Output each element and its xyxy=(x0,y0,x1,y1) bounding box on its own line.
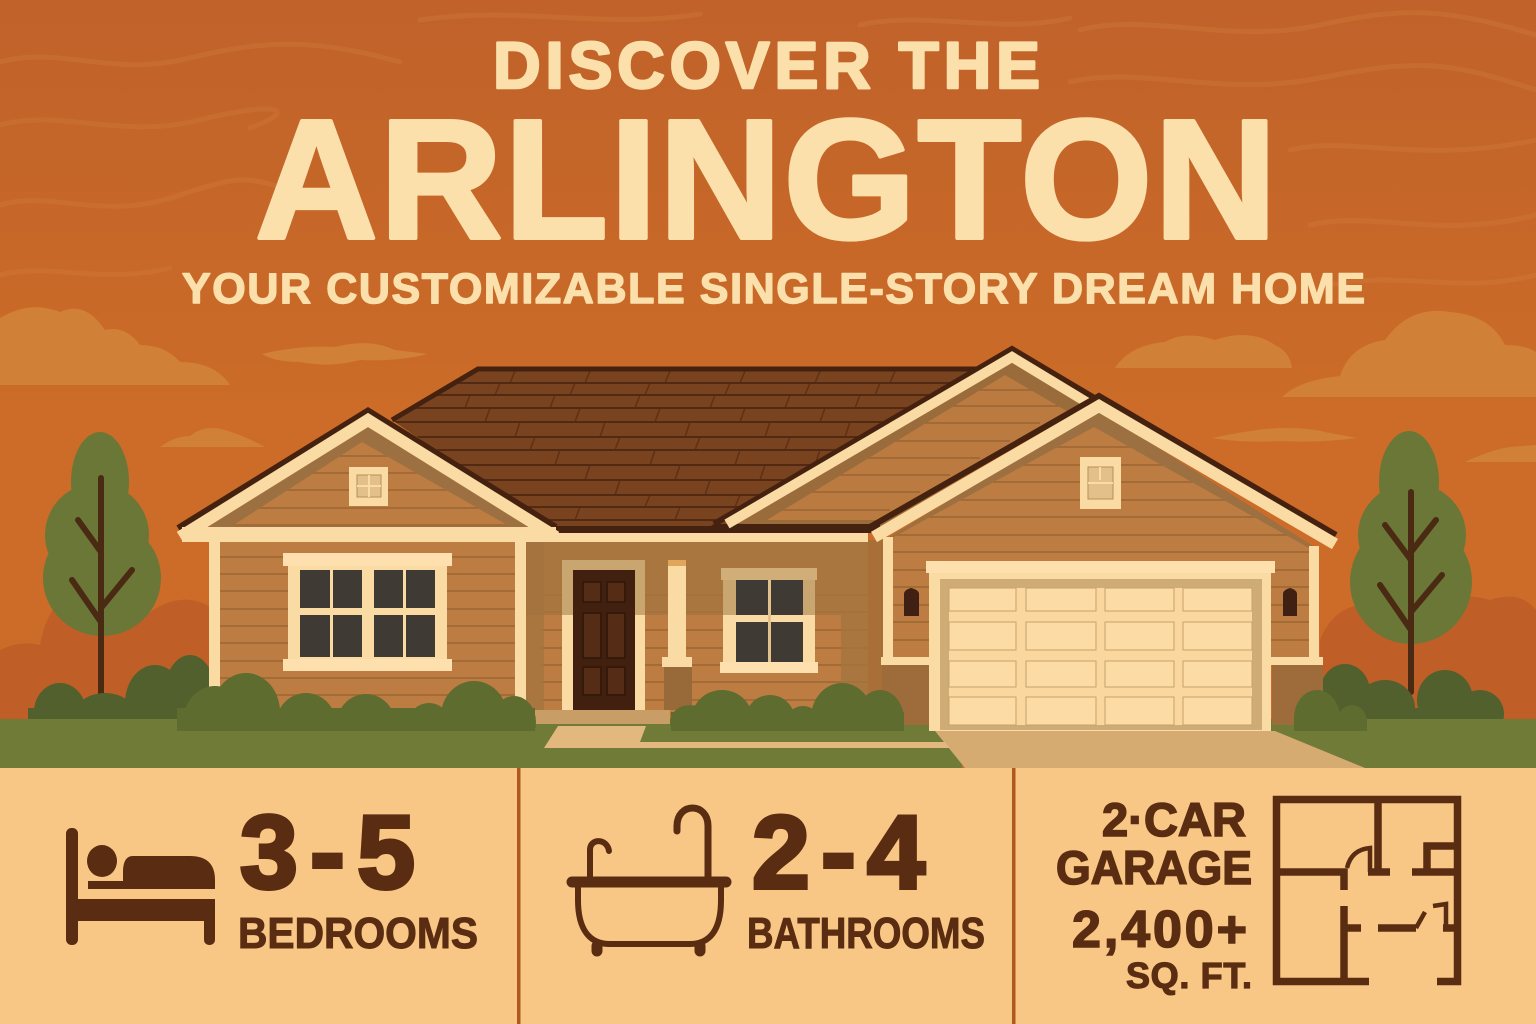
title: ARLINGTON xyxy=(255,85,1277,275)
stats panel xyxy=(0,768,1536,1024)
title: YOUR CUSTOMIZABLE SINGLE-STORY DREAM HOME xyxy=(182,265,1365,313)
stat: garage and square feet: 2,400+ xyxy=(1072,901,1247,959)
icon: bed xyxy=(66,828,215,945)
front shrubs: center xyxy=(670,683,904,731)
background sky xyxy=(0,0,1536,770)
left eave trim and posts xyxy=(182,527,868,702)
column dividers xyxy=(517,768,1016,1024)
title: DISCOVER THE xyxy=(493,28,1040,102)
icon: bathtub xyxy=(572,808,726,951)
main hip roof xyxy=(380,369,1000,533)
stat: bedrooms xyxy=(238,795,478,958)
left gable wall xyxy=(178,410,556,537)
lawn xyxy=(0,719,1536,768)
gable vent: left xyxy=(349,467,388,506)
garage wing wall xyxy=(868,396,1336,725)
stat: garage and square feet: 2·CAR xyxy=(1102,793,1246,846)
driveway xyxy=(935,731,1365,768)
sky wave pattern xyxy=(0,13,1536,285)
wall lamps xyxy=(904,588,1297,616)
front shrubs: right xyxy=(1294,690,1367,731)
icon: floor plan xyxy=(1276,800,1458,982)
gable vent: right xyxy=(1080,457,1121,509)
stat: bathrooms: BATHROOMS xyxy=(747,909,985,958)
stat: bathrooms xyxy=(747,795,985,958)
garage door xyxy=(926,561,1275,731)
front step xyxy=(534,710,670,724)
tree: right xyxy=(1350,431,1472,692)
tree: left xyxy=(43,432,161,695)
right front window xyxy=(720,568,818,673)
stat: bedrooms: 3-5 xyxy=(240,795,415,911)
front shrubs: left xyxy=(177,673,536,731)
clouds xyxy=(0,307,1536,462)
front door xyxy=(562,560,645,710)
stat: garage and square feet xyxy=(1056,793,1252,996)
stat: garage and square feet: SQ. FT. xyxy=(1126,955,1252,996)
left section wall xyxy=(220,540,526,712)
title xyxy=(182,28,1365,313)
distant hills xyxy=(0,590,1536,720)
stat: garage and square feet: GARAGE xyxy=(1056,841,1252,894)
porch column xyxy=(662,560,692,710)
house xyxy=(178,349,1336,731)
center gable wall xyxy=(700,349,1096,533)
front walkway xyxy=(544,726,950,748)
middle wall xyxy=(526,540,886,712)
back shrubs xyxy=(28,655,1504,719)
large window xyxy=(283,553,452,671)
stat: bathrooms: 2-4 xyxy=(752,795,925,911)
stat: bedrooms: BEDROOMS xyxy=(238,909,478,958)
